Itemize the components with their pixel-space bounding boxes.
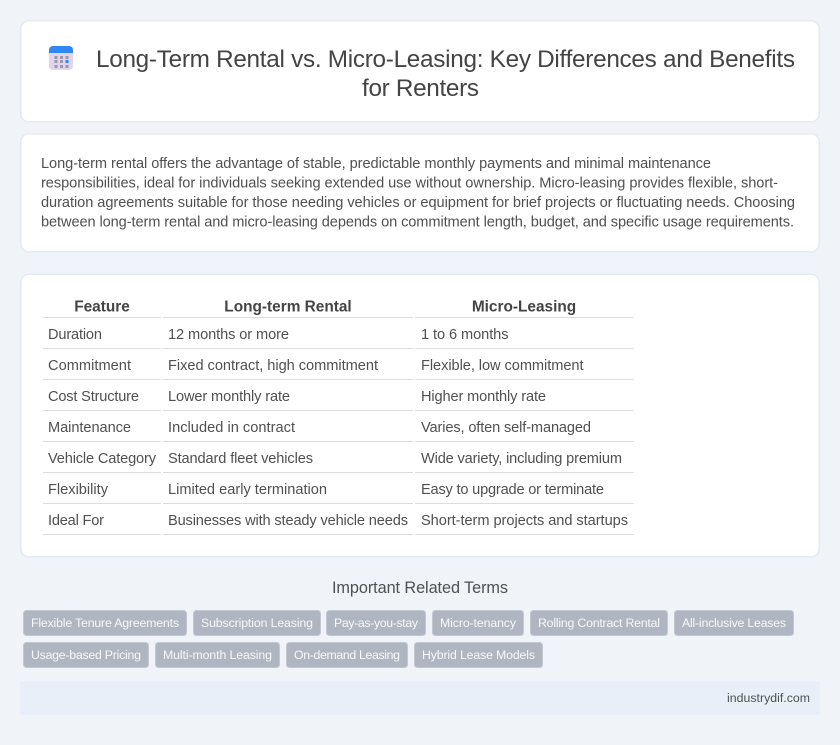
tags: related terms — [24, 610, 794, 668]
table header — [74, 298, 576, 316]
tag — [156, 642, 280, 668]
row: ideal for: Short-term projects and startups — [421, 513, 628, 529]
table header: Micro-Leasing — [472, 298, 576, 316]
title — [96, 46, 795, 102]
tag: All-inclusive Leases — [682, 616, 786, 630]
tag — [286, 642, 408, 668]
text block: summary: duration agreements suitable for those needing vehicles or equipment for brief projects or fluctuating needs. Choosing — [41, 195, 795, 211]
row: commitment: Commitment — [48, 358, 131, 374]
row: ideal for: Ideal For — [48, 513, 104, 529]
row: duration: Duration — [48, 327, 102, 343]
tag: On-demand Leasing — [294, 648, 400, 662]
table header: Long-term Rental — [224, 298, 352, 316]
row: maintenance: Varies, often self-managed — [421, 420, 591, 436]
tag: Multi-month Leasing — [163, 648, 272, 662]
row: flexibility: Flexibility — [48, 482, 109, 498]
text block: summary: Long-term rental offers the advantage of stable, predictable monthly payments and minimal maintenance — [41, 156, 711, 172]
row: ideal for: Businesses with steady vehicle needs — [168, 513, 408, 529]
row: flexibility: Limited early termination — [168, 482, 327, 498]
panel: description — [21, 134, 819, 252]
row: cost structure — [48, 389, 546, 405]
row: maintenance: Included in contract — [168, 420, 295, 436]
title: Long-Term Rental vs. Micro-Leasing: Key Differences and Benefits — [96, 46, 795, 73]
row: commitment: Flexible, low commitment — [421, 358, 584, 374]
row: flexibility: Easy to upgrade or terminate — [421, 482, 604, 498]
row: cost structure: Lower monthly rate — [168, 389, 290, 405]
tag — [432, 610, 524, 636]
row: ideal for — [48, 513, 628, 529]
row: vehicle category: Vehicle Category — [48, 451, 157, 467]
row: flexibility — [48, 482, 604, 498]
tag — [24, 610, 186, 636]
text block: summary: responsibilities, ideal for individuals seeking extended use without ownership. Micro-leasing provides flexible, short- — [41, 176, 778, 192]
row: maintenance — [48, 420, 591, 436]
text block: summary — [41, 156, 795, 230]
tag: Micro-tenancy — [440, 616, 517, 630]
row: vehicle category — [48, 451, 622, 467]
row: vehicle category: Wide variety, including premium — [421, 451, 622, 467]
tag: Hybrid Lease Models — [422, 648, 535, 662]
table header: Feature — [74, 298, 130, 316]
tag: Usage-based Pricing — [31, 648, 141, 662]
tag — [530, 610, 668, 636]
icon: calendar — [49, 46, 73, 70]
row: duration — [48, 327, 508, 343]
footer bar — [20, 681, 820, 715]
row: duration: 1 to 6 months — [421, 327, 508, 343]
tag: Rolling Contract Rental — [538, 616, 660, 630]
row: cost structure: Cost Structure — [48, 389, 139, 405]
row: commitment: Fixed contract, high commitment — [168, 358, 378, 374]
row: maintenance: Maintenance — [48, 420, 131, 436]
tag: Subscription Leasing — [201, 616, 313, 630]
row: duration: 12 months or more — [168, 327, 289, 343]
tag — [326, 610, 426, 636]
tag: Pay-as-you-stay — [334, 616, 419, 630]
footer source text: industrydif.com — [727, 691, 810, 705]
row: vehicle category: Standard fleet vehicles — [168, 451, 313, 467]
tag — [24, 642, 148, 668]
row: cost structure: Higher monthly rate — [421, 389, 546, 405]
header panel — [21, 21, 819, 122]
panel: comparison table — [21, 274, 819, 557]
tag — [674, 610, 794, 636]
text block: summary: between long-term rental and micro-leasing depends on commitment length, budget, and specific usage requirements. — [41, 214, 794, 230]
heading: related terms: Important Related Terms — [332, 579, 508, 597]
row: commitment — [48, 358, 584, 374]
tag — [194, 610, 320, 636]
tag: Flexible Tenure Agreements — [31, 616, 179, 630]
tag — [414, 642, 542, 668]
title: for Renters — [362, 75, 479, 102]
